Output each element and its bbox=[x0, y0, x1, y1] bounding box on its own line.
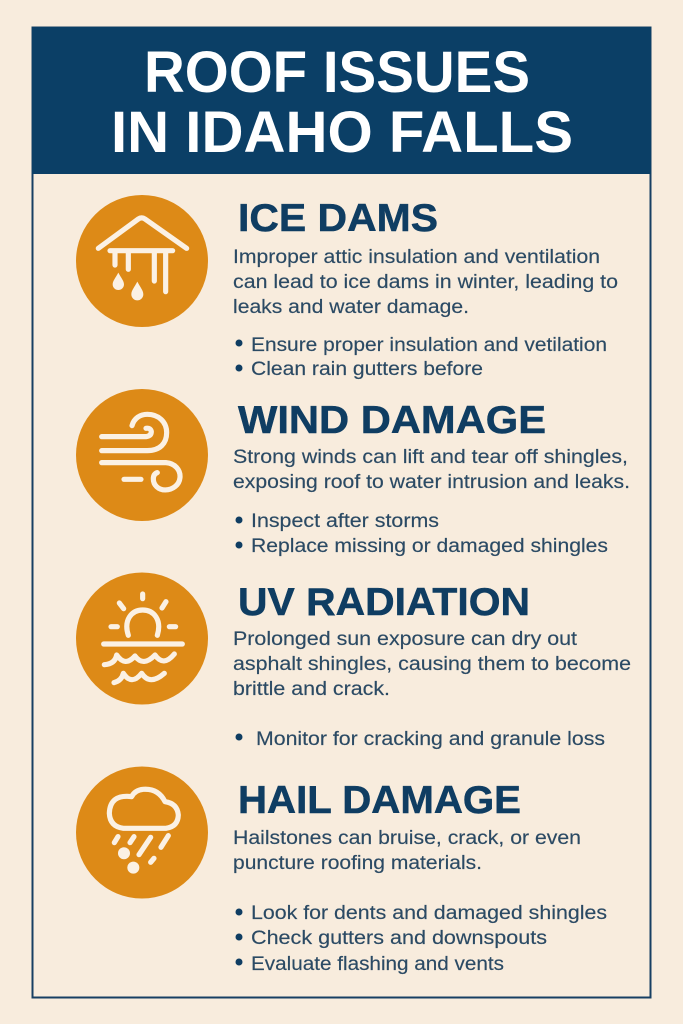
description: ice dams: leaks and water damage. bbox=[233, 297, 469, 318]
heading: uv radiation: UV RADIATION bbox=[238, 581, 530, 624]
description: hail damage: Hailstones can bruise, crack, or even bbox=[233, 828, 581, 849]
tips: wind damage: Inspect after storms bbox=[251, 511, 439, 532]
tips: ice dams: Clean rain gutters before bbox=[251, 359, 483, 380]
description: wind damage bbox=[233, 447, 630, 493]
heading: wind damage: WIND DAMAGE bbox=[238, 399, 546, 442]
heading: hail damage: HAIL DAMAGE bbox=[238, 779, 521, 822]
icon: sun over waves bbox=[76, 572, 208, 704]
description: uv radiation: Prolonged sun exposure can dry out bbox=[233, 629, 578, 650]
title: IN IDAHO FALLS bbox=[111, 100, 573, 165]
description: uv radiation bbox=[233, 629, 631, 700]
description: hail damage bbox=[233, 828, 581, 874]
tips: ice dams bbox=[236, 335, 607, 380]
description: wind damage: exposing roof to water intrusion and leaks. bbox=[233, 472, 630, 493]
title: ROOF ISSUES bbox=[144, 40, 530, 105]
title bbox=[111, 40, 573, 165]
description: hail damage: puncture roofing materials. bbox=[233, 853, 482, 874]
tips: hail damage: Evaluate flashing and vents bbox=[251, 954, 504, 975]
icon: wind gusts bbox=[76, 389, 208, 521]
description: uv radiation: asphalt shingles, causing them to become bbox=[233, 654, 631, 675]
tips: wind damage bbox=[236, 511, 608, 557]
tips: hail damage bbox=[236, 903, 607, 975]
panel: hail damage bbox=[76, 766, 607, 975]
panel: uv radiation bbox=[76, 572, 631, 750]
tips: ice dams: Ensure proper insulation and vetilation bbox=[251, 335, 607, 356]
tips: uv radiation: Monitor for cracking and granule loss bbox=[256, 729, 605, 750]
heading: ice dams: ICE DAMS bbox=[238, 197, 438, 240]
icon: roof with icicles and drips bbox=[76, 195, 208, 327]
panel: ice dams bbox=[76, 195, 618, 380]
panel: wind damage bbox=[76, 389, 630, 557]
description: ice dams bbox=[233, 247, 618, 318]
tips: hail damage: Check gutters and downspouts bbox=[251, 928, 547, 949]
description: uv radiation: brittle and crack. bbox=[233, 679, 390, 700]
description: ice dams: can lead to ice dams in winter, leading to bbox=[233, 272, 618, 293]
description: ice dams: Improper attic insulation and ventilation bbox=[233, 247, 600, 268]
tips: hail damage: Look for dents and damaged shingles bbox=[251, 903, 607, 924]
icon: hail cloud bbox=[76, 766, 208, 898]
tips: wind damage: Replace missing or damaged shingles bbox=[251, 536, 608, 557]
description: wind damage: Strong winds can lift and tear off shingles, bbox=[233, 447, 628, 468]
title banner bbox=[32, 27, 651, 174]
